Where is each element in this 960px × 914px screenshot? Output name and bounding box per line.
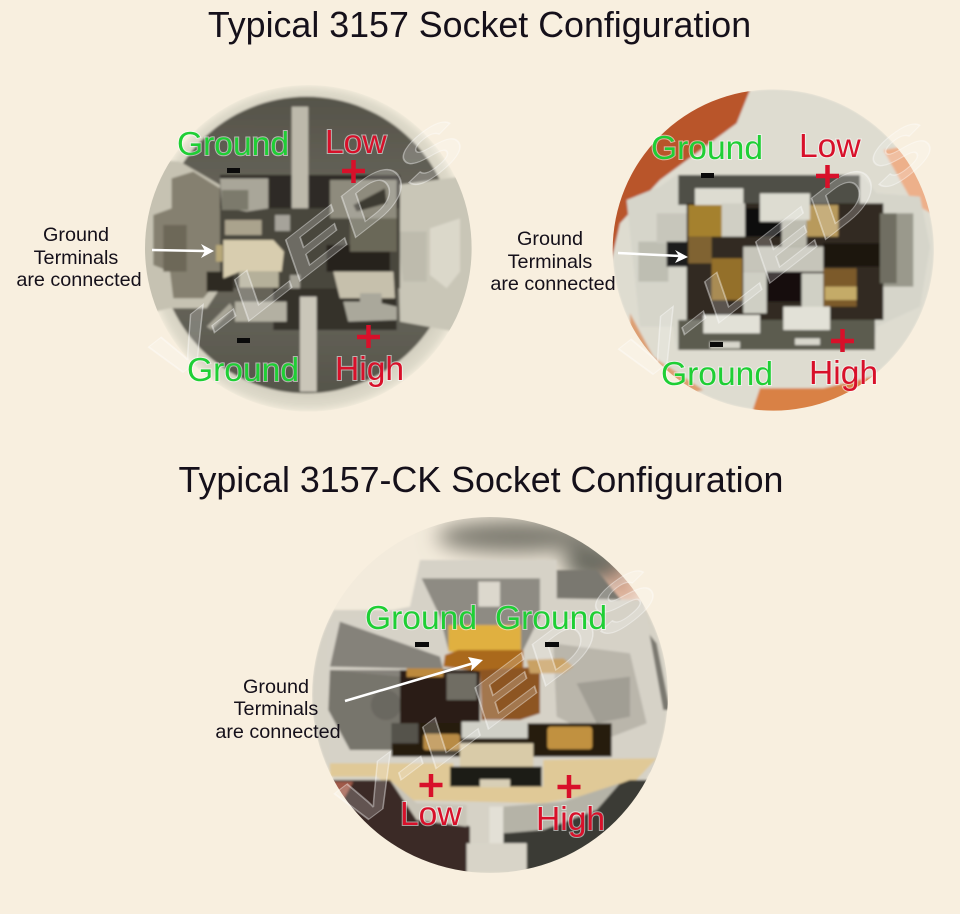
panel: 3157 socket right photo [610,80,943,423]
plug housing [624,189,924,215]
lower ring [323,780,470,873]
watermarks: V-LEDS [134,105,478,395]
title: 3157-CK socket: Typical 3157-CK Socket Configuration [179,460,783,500]
callout: left socket ground terminals: Terminals [34,247,118,269]
left body [140,158,220,315]
panel: 3157-CK socket photo [310,510,670,873]
watermarks [134,105,948,842]
labels: CK socket [365,600,607,838]
callout: right socket ground terminals: Terminals [508,251,592,273]
lower terminals [423,734,460,750]
watermarks: V-LEDS [604,107,948,397]
callout: CK socket ground terminals: Terminals [234,698,318,720]
callout: CK socket ground terminals: Ground [243,676,309,698]
callout: right socket ground terminals: Ground [517,228,583,250]
spines [292,107,308,208]
title: 3157 socket: Typical 3157 Socket Configuration [208,5,751,45]
plastic tabs [695,188,743,205]
gold ground strap [448,625,521,652]
labels: right socket: High [809,355,878,392]
callout: right socket ground terminals: are connected [490,273,616,295]
labels: left socket: High [335,351,404,388]
labels: right socket: Ground [651,130,763,167]
watermarks: V-LEDS [320,554,671,842]
blurred background top [334,517,638,610]
callout: CK socket ground terminals [215,657,483,743]
dark cavity [220,175,400,212]
cavity [678,175,860,205]
terminals [220,178,268,212]
plug housing [398,560,664,772]
labels: left socket: Ground [177,126,289,163]
gold terminals [688,205,723,237]
callout: left socket ground terminals: Ground [43,224,109,246]
callout: left socket ground terminals: are connected [16,269,142,291]
labels: left socket: Ground [187,352,299,389]
labels: CK socket: High [536,801,605,838]
labels: left socket [177,124,404,389]
recesses [422,578,540,650]
labels: right socket: Ground [661,356,773,393]
dark cavity [400,670,480,730]
labels: CK socket: Ground [495,600,607,637]
labels: left socket: Low [325,124,387,161]
labels: right socket [651,128,878,393]
callout: left socket ground terminals [16,224,214,291]
cream base [330,758,657,803]
callout: CK socket ground terminals: are connected [215,721,341,743]
panel: 3157 socket left photo [140,85,473,412]
labels: CK socket: Low [400,796,462,833]
labels: CK socket: Ground [365,600,477,637]
callout: right socket ground terminals [490,228,688,295]
right body [397,175,473,335]
orange shell [612,91,751,260]
labels: right socket: Low [799,128,861,165]
